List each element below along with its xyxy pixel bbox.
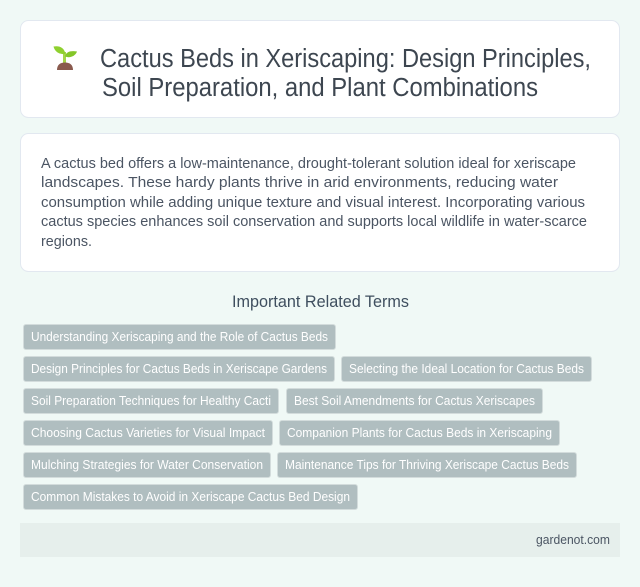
- tag: [24, 452, 270, 478]
- title: Cactus Beds in Xeriscaping: Design Principles,: [100, 45, 591, 73]
- tag: [24, 420, 272, 446]
- icon: seedling: [54, 46, 77, 70]
- heading: related terms: Important Related Terms: [232, 293, 409, 311]
- footer bar: [20, 523, 620, 557]
- tag: Companion Plants for Cactus Beds in Xeriscaping: [287, 426, 552, 440]
- tag: Mulching Strategies for Water Conservation: [31, 458, 263, 472]
- description text: cactus species enhances soil conservation and supports local wildlife in water-scarce: [41, 213, 587, 230]
- tag: [278, 452, 576, 478]
- panel: description: [20, 134, 620, 272]
- tag: Maintenance Tips for Thriving Xeriscape Cactus Beds: [285, 458, 569, 472]
- title: [100, 45, 591, 102]
- footer source: gardenot.com: [536, 532, 610, 547]
- description text: consumption while adding unique texture and visual interest. Incorporating various: [41, 194, 585, 211]
- tag: Design Principles for Cactus Beds in Xeriscape Gardens: [31, 362, 327, 376]
- tag: [286, 388, 542, 414]
- tag: [24, 484, 358, 510]
- description text: landscapes. These hardy plants thrive in arid environments, reducing water: [41, 174, 558, 191]
- tag: [24, 356, 334, 382]
- description text: [41, 155, 587, 250]
- tag list: [24, 324, 592, 510]
- tag: Choosing Cactus Varieties for Visual Impact: [31, 426, 265, 440]
- tag: Best Soil Amendments for Cactus Xeriscapes: [294, 394, 535, 408]
- tag: [280, 420, 560, 446]
- tag: Soil Preparation Techniques for Healthy Cacti: [31, 394, 271, 408]
- tag: Understanding Xeriscaping and the Role of Cactus Beds: [31, 330, 328, 344]
- title: Soil Preparation, and Plant Combinations: [102, 74, 538, 102]
- tag: [24, 388, 278, 414]
- panel: title card: [20, 20, 620, 118]
- tag: Common Mistakes to Avoid in Xeriscape Cactus Bed Design: [31, 490, 350, 504]
- tag: [24, 324, 336, 350]
- tag: [342, 356, 592, 382]
- description text: A cactus bed offers a low-maintenance, drought-tolerant solution ideal for xeriscape: [41, 155, 576, 172]
- tag: Selecting the Ideal Location for Cactus Beds: [349, 362, 584, 376]
- description text: regions.: [41, 233, 92, 250]
